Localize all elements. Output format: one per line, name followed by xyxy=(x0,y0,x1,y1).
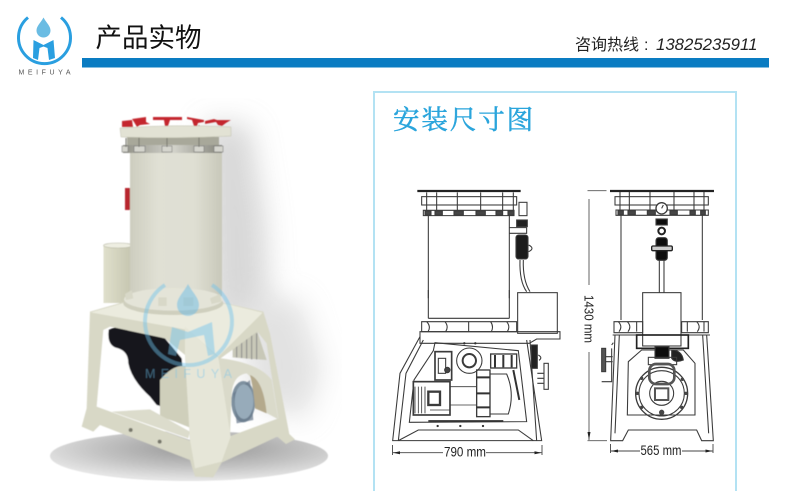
motor xyxy=(231,380,255,423)
side view drawing xyxy=(392,191,560,460)
depth dimension: 565 mm xyxy=(640,443,682,458)
tank base flange xyxy=(123,288,223,315)
height dimension xyxy=(582,191,607,441)
window backdrop xyxy=(97,330,190,440)
front view drawing xyxy=(582,191,714,458)
front view upper xyxy=(610,191,714,346)
stand frame xyxy=(82,302,295,477)
front view pump xyxy=(627,335,695,419)
depth dimension xyxy=(610,443,713,458)
height dimension: 1430 mm xyxy=(582,295,596,343)
side view upper xyxy=(417,191,532,298)
side cylinder xyxy=(104,243,134,303)
panel heading: 安装尺寸图 xyxy=(393,105,535,135)
floor shadow xyxy=(50,431,328,481)
width dimension: 790 mm xyxy=(444,444,486,460)
hotline: 咨询热线 xyxy=(575,36,639,54)
tank lid flange xyxy=(120,126,231,138)
page title: 产品实物 xyxy=(96,23,202,53)
red side valve xyxy=(125,188,130,210)
stand front pillar xyxy=(185,327,231,468)
tank clamp band xyxy=(122,125,223,153)
pump cover xyxy=(160,366,192,428)
photo shadow xyxy=(205,122,322,420)
hotline xyxy=(575,35,757,54)
vented panel xyxy=(233,332,267,360)
front view lower xyxy=(602,322,713,441)
red lid handles xyxy=(122,117,231,127)
hotline: 13825235911 xyxy=(656,35,757,54)
black pump xyxy=(108,327,187,413)
installation panel border xyxy=(374,92,736,491)
front outlet valve xyxy=(602,343,613,382)
lower shelf xyxy=(112,409,190,438)
motor cover xyxy=(213,357,278,440)
header bar xyxy=(82,58,769,68)
stand bolts xyxy=(129,428,162,444)
pump stand and motor xyxy=(82,288,295,477)
header logo xyxy=(18,18,71,76)
side outlet valve xyxy=(531,345,548,389)
watermark xyxy=(145,284,233,381)
header logo: MEIFUYA xyxy=(18,70,71,76)
hotline: : xyxy=(644,37,648,54)
width dimension xyxy=(392,444,542,460)
side view lower xyxy=(393,290,560,441)
product photo xyxy=(50,117,328,481)
tank body xyxy=(130,153,222,301)
stand top face xyxy=(91,303,263,357)
gauge and valve xyxy=(652,203,672,293)
watermark: MEIFUYA xyxy=(145,367,233,381)
side view pump internals xyxy=(413,348,519,421)
side view valve xyxy=(509,202,532,292)
